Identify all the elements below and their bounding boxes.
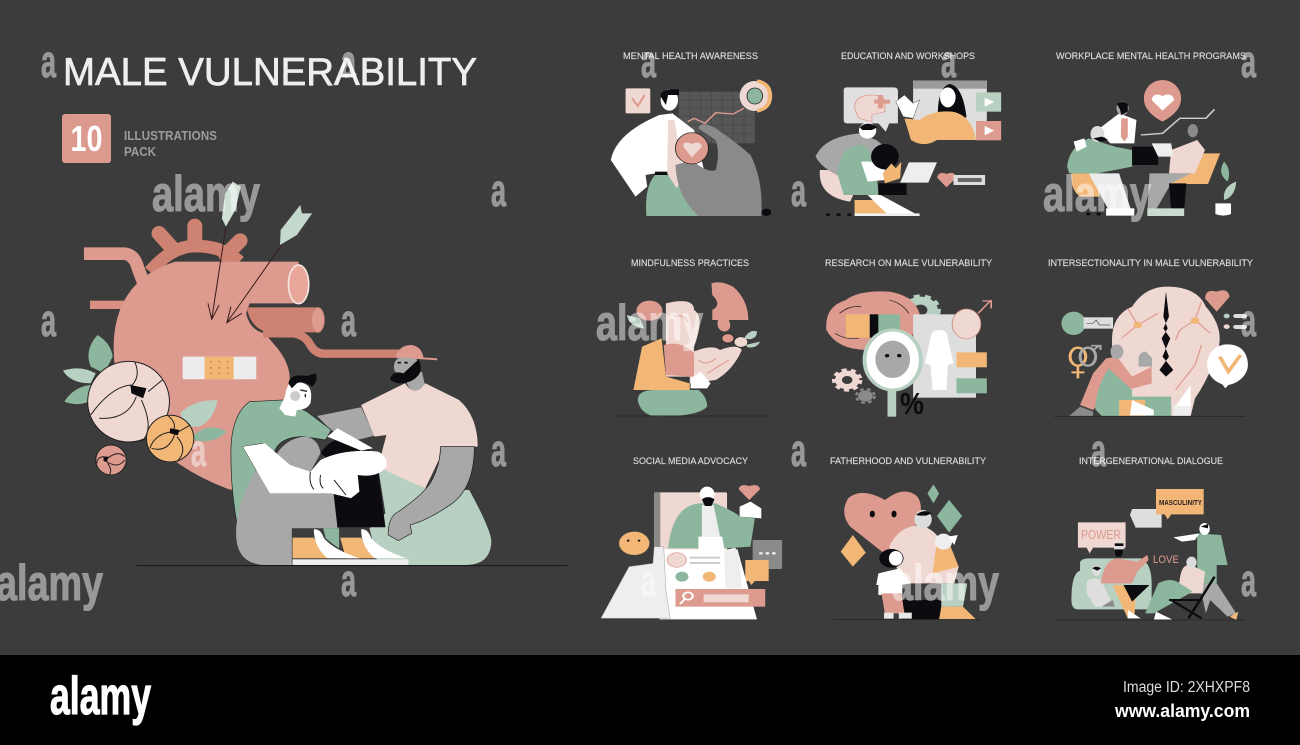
subtitle: illustrations pack <box>124 129 217 159</box>
watermarks: a <box>191 425 207 476</box>
watermarks: a <box>641 36 657 87</box>
watermarks: alamy <box>152 166 260 222</box>
watermarks: a <box>341 555 357 606</box>
heading: SOCIAL MEDIA ADVOCACY <box>633 456 749 467</box>
arrows in heart <box>208 182 312 323</box>
heading: INTERSECTIONALITY IN MALE VULNERABILITY <box>1048 258 1254 269</box>
bandage <box>183 357 256 379</box>
watermarks: a <box>791 165 807 216</box>
panel 5: research on male vulnerability <box>825 258 993 421</box>
watermarks: a <box>791 425 807 476</box>
panel 3: workplace mental health programs <box>1056 51 1246 216</box>
watermarks: alamy <box>596 295 703 351</box>
watermarks: a <box>341 36 357 87</box>
speech label: masculinity: MASCULINITY <box>1159 498 1202 507</box>
watermarks <box>0 36 1257 611</box>
panel 4: mindfulness practices <box>616 258 768 417</box>
footer: alamy logo: alamy <box>50 667 151 726</box>
heading: MINDFULNESS PRACTICES <box>631 258 749 269</box>
subtitle: illustrations pack: PACK <box>124 145 156 159</box>
heading: WORKPLACE MENTAL HEALTH PROGRAMS <box>1056 51 1246 62</box>
watermarks: a <box>641 555 657 606</box>
panel 7: social media advocacy <box>601 456 782 619</box>
percent symbol: % <box>900 386 924 421</box>
subtitle: illustrations pack: ILLUSTRATIONS <box>124 129 217 143</box>
badge: 10 illustrations <box>62 114 111 163</box>
heading: INTERGENERATIONAL DIALOGUE <box>1079 456 1223 467</box>
panel 9: intergenerational dialogue <box>1056 456 1245 620</box>
watermarks: alamy <box>1043 166 1151 222</box>
badge: 10 illustrations: 10 <box>70 118 102 159</box>
watermarks: alamy <box>0 555 103 611</box>
footer: website: www.alamy.com <box>1114 701 1250 721</box>
watermarks: alamy <box>892 555 999 611</box>
heading: MENTAL HEALTH AWARENESS <box>623 51 758 62</box>
panel 2: education and workshops <box>816 51 1001 216</box>
speech label: love: LOVE <box>1153 554 1179 566</box>
watermarks: a <box>1091 425 1107 476</box>
heart with vessels <box>84 226 400 490</box>
heading: FATHERHOOD AND VULNERABILITY <box>830 456 987 467</box>
seated man with cap comforting <box>317 345 491 565</box>
seated sad boy hugging knees <box>231 373 408 565</box>
watermarks: a <box>1241 36 1257 87</box>
watermarks: a <box>41 36 57 87</box>
watermarks: a <box>41 295 57 346</box>
watermarks: a <box>491 425 507 476</box>
heading: RESEARCH ON MALE VULNERABILITY <box>825 258 993 269</box>
title: MALE VULNERABILITY <box>63 51 477 94</box>
main illustration: wounded heart and two men <box>63 182 567 566</box>
speech label: power: POWER <box>1081 527 1121 542</box>
watermarks: a <box>1241 295 1257 346</box>
panel 6: intersectionality in male vulnerability <box>1048 258 1254 416</box>
watermarks: a <box>341 295 357 346</box>
heading: EDUCATION AND WORKSHOPS <box>841 51 975 62</box>
watermarks: a <box>941 36 957 87</box>
flowers and leaves <box>63 335 227 475</box>
panel 1: mental health awareness <box>611 51 771 216</box>
watermarks: a <box>491 165 507 216</box>
footer: image id: Image ID: 2XHXPF8 <box>1123 679 1250 696</box>
watermarks: a <box>1241 555 1257 606</box>
panel 8: fatherhood and vulnerability <box>830 456 987 620</box>
